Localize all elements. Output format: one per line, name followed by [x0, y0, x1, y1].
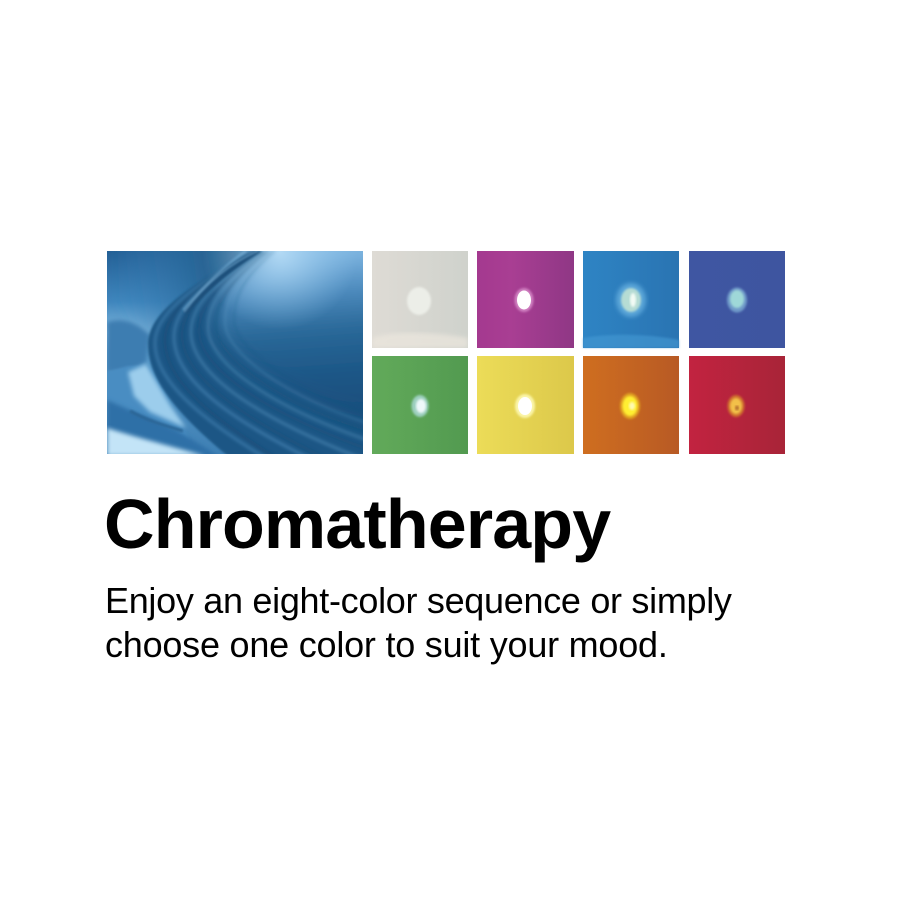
colour tile: red	[689, 356, 785, 454]
photo: water ripples	[107, 251, 363, 454]
colour tile: white	[372, 251, 468, 348]
colour tile: light blue	[583, 251, 679, 348]
colour tile: yellow	[477, 356, 574, 454]
colour tile: green	[372, 356, 468, 454]
body text: Enjoy an eight-color sequence or simply	[105, 580, 732, 621]
body text	[105, 580, 732, 665]
body text: choose one color to suit your mood.	[105, 624, 668, 665]
colour tile: orange	[583, 356, 679, 454]
colour tile: magenta	[477, 251, 574, 348]
dome	[146, 276, 363, 454]
colour tile: dark blue	[689, 251, 785, 348]
image strip: photo and colour tiles	[107, 251, 785, 454]
title: Chromatherapy	[104, 485, 610, 563]
